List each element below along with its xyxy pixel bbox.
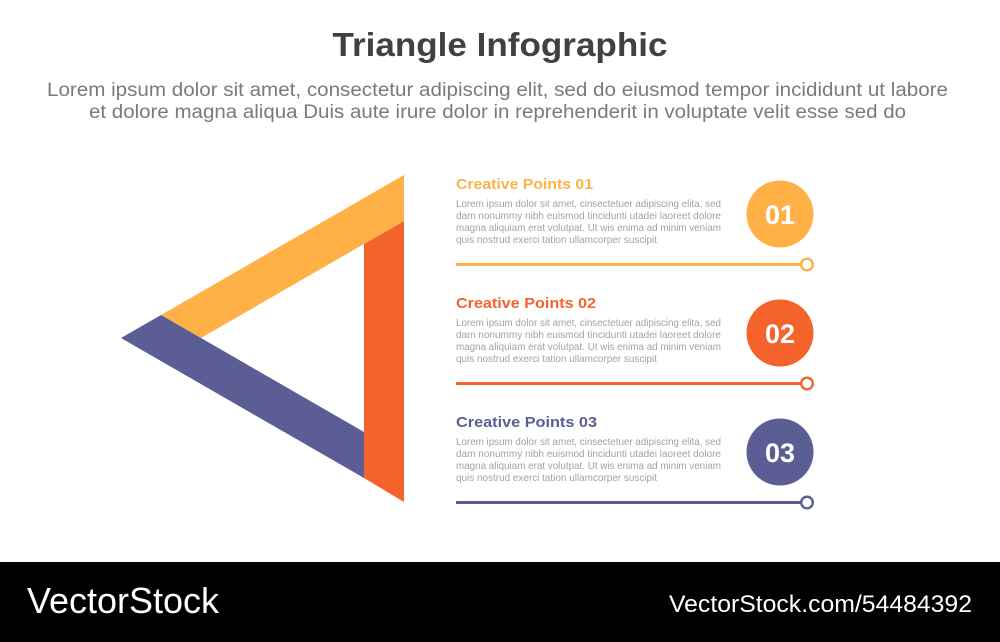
point 02 body text: dam nonummy nibh euismod tincidunti utadei laoreet dolore: [456, 330, 721, 341]
point 02 body text: quis nostrud exerci tation ullamcorper suscipit: [456, 354, 657, 365]
point 01 heading: Creative Points 01: [456, 176, 593, 193]
point 03 heading: Creative Points 03: [456, 414, 597, 431]
point 02 number badge: [746, 300, 814, 366]
point 02: [456, 295, 814, 389]
point 01 body text: magna aliquiam erat volutpat. Ut wis enima ad minim veniam: [456, 223, 721, 234]
point 03 body text: dam nonummy nibh euismod tincidunti utadei laoreet dolore: [456, 449, 721, 460]
point 01 body text: dam nonummy nibh euismod tincidunti utadei laoreet dolore: [456, 211, 721, 222]
footer brand name: VectorStock: [27, 580, 220, 621]
subtitle text: Lorem ipsum dolor sit amet, consectetur adipiscing elit, sed do eiusmod tempor incididunt ut labore: [47, 80, 948, 101]
point 03 number badge: [746, 418, 814, 486]
point 03 body text: [456, 437, 721, 484]
subtitle text: [47, 80, 948, 123]
triangle side: orange: [364, 221, 404, 502]
point 03 body text: Lorem ipsum dolor sit amet, cinsectetuer adipiscing elita, sed: [456, 437, 721, 448]
watermark footer bar: [0, 562, 1000, 642]
point 02 body text: Lorem ipsum dolor sit amet, cinsectetuer adipiscing elita, sed: [456, 318, 721, 329]
point 02 number badge: 02: [765, 319, 795, 349]
subtitle text: et dolore magna aliqua Duis aute irure dolor in reprehenderit in voluptate velit esse sed do: [89, 102, 906, 123]
point 01 body text: [456, 199, 721, 246]
point 01 connector line: [456, 259, 813, 270]
title: Triangle Infographic: [332, 26, 668, 63]
triangle side: indigo: [121, 315, 364, 478]
point 02 body text: magna aliquiam erat volutpat. Ut wis enima ad minim veniam: [456, 342, 721, 353]
triangle diagram: [121, 175, 404, 502]
point 02 body text: [456, 318, 721, 365]
point 01 number badge: 01: [765, 200, 795, 230]
point 03 number badge: 03: [765, 438, 795, 468]
point 01 body text: quis nostrud exerci tation ullamcorper suscipit: [456, 235, 657, 246]
point 03 connector line: [456, 497, 813, 508]
point 02 heading: Creative Points 02: [456, 295, 596, 312]
point 03: [456, 414, 814, 508]
point 01 number badge: [746, 180, 814, 248]
point 03 body text: magna aliquiam erat volutpat. Ut wis enima ad minim veniam: [456, 461, 721, 472]
point 03 body text: quis nostrud exerci tation ullamcorper suscipit: [456, 473, 657, 484]
footer image reference: VectorStock.com/54484392: [669, 591, 972, 618]
triangle side: yellow: [161, 175, 404, 338]
point 01: [456, 176, 814, 270]
point 01 body text: Lorem ipsum dolor sit amet, cinsectetuer adipiscing elita, sed: [456, 199, 721, 210]
point 02 connector line: [456, 378, 813, 389]
